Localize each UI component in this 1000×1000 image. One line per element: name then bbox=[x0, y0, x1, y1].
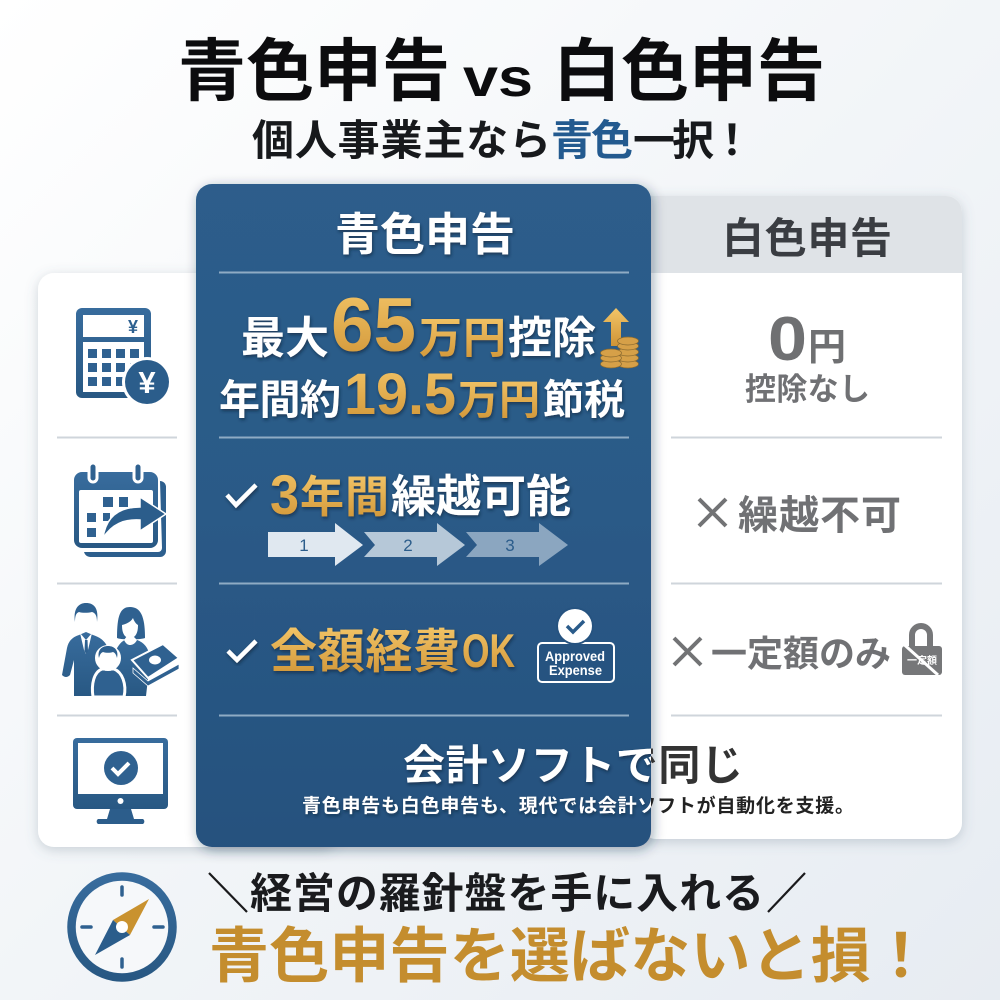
white column: no deduction: 控除なし bbox=[745, 372, 870, 407]
row 3: full expense heading: 全額経費 bbox=[270, 625, 460, 678]
row 2: three year arrows: 1 bbox=[299, 536, 309, 555]
row 4: shared heading and note on white: 青色申告も白色申告も、現代では会計ソフトが自動化を支援。 bbox=[302, 794, 854, 817]
icon: crossed lock: 一定額 bbox=[907, 654, 937, 667]
white column header bbox=[640, 196, 962, 273]
row 2: three year arrows bbox=[268, 523, 568, 566]
child bbox=[92, 669, 125, 697]
white column: no deduction: 円 bbox=[808, 327, 846, 369]
blue column header: 青色申告 bbox=[335, 209, 515, 260]
panel: blue column bbox=[196, 184, 651, 847]
icon: crossed lock bbox=[899, 626, 942, 675]
subtitle: 一択！ bbox=[633, 117, 753, 164]
row 1: deduction amount: 65 bbox=[331, 283, 416, 368]
row 1: deduction amount: 19.5 bbox=[344, 362, 456, 427]
row 4: shared heading and note on white bbox=[651, 746, 842, 814]
row 3: full expense heading: OK bbox=[462, 624, 515, 677]
row 1: deduction amount bbox=[219, 283, 625, 427]
row 2: three year arrows: 3 bbox=[505, 536, 515, 555]
row 4: shared heading and note on blue bbox=[303, 744, 651, 818]
icon: coins and up arrow bbox=[600, 308, 638, 368]
row 1: deduction amount: 節税 bbox=[543, 377, 625, 423]
icon: family with money bbox=[62, 603, 179, 697]
row 2: carryover heading bbox=[270, 463, 571, 526]
icon: approved expense stamp: Approved bbox=[545, 648, 605, 664]
icon: calculator: ¥ bbox=[128, 317, 138, 337]
row 3: check mark bbox=[228, 641, 256, 660]
subtitle: 個人事業主なら bbox=[252, 117, 551, 164]
title: vs bbox=[463, 48, 533, 108]
bottom call to action: 青色申告を選ばないと損！ bbox=[209, 923, 931, 990]
title: 青色申告 bbox=[178, 34, 450, 110]
row 1: deduction amount: 最大 bbox=[241, 314, 329, 363]
row 1: deduction amount: 年間約 bbox=[219, 377, 341, 423]
subtitle bbox=[252, 117, 753, 164]
row 4: shared heading and note on blue: 会計ソフトで同じ bbox=[403, 742, 743, 789]
divider lines bbox=[57, 272, 942, 716]
row 2: carryover heading: 3 bbox=[270, 463, 299, 526]
man bbox=[62, 632, 107, 696]
bottom tagline: 経営の羅針盤を手に入れる bbox=[250, 870, 764, 917]
white column: no deduction: 0 bbox=[768, 305, 807, 374]
money stack bbox=[132, 644, 179, 678]
row 1: deduction amount: 万円 bbox=[419, 315, 506, 363]
row 1: deduction amount: 控除 bbox=[508, 314, 596, 363]
panel: white comparison card bbox=[38, 196, 962, 847]
title bbox=[178, 34, 825, 110]
row 2: carryover heading: 繰越可能 bbox=[391, 471, 571, 522]
icon: approved expense stamp: Expense bbox=[549, 662, 602, 678]
icon: compass bbox=[72, 876, 172, 978]
icon: approved expense stamp bbox=[538, 607, 614, 682]
title: 白色申告 bbox=[553, 34, 825, 110]
row 4: shared heading and note on blue: 青色申告も白色申告も、現代では会計ソフトが自動化を支援。 bbox=[302, 794, 854, 817]
white column: fixed amount only: 一定額のみ bbox=[711, 633, 891, 674]
subtitle: 青色 bbox=[551, 117, 633, 164]
row 2: check mark bbox=[227, 485, 256, 505]
row 4: shared heading and note on white: 会計ソフトで同じ bbox=[403, 742, 743, 789]
woman bbox=[115, 639, 149, 696]
icon: monitor with check bbox=[73, 738, 168, 824]
icon: calculator: ¥ bbox=[138, 365, 156, 400]
white column: no carryover: 繰越不可 bbox=[738, 494, 901, 538]
row 1: deduction amount: 万円 bbox=[458, 377, 540, 423]
row 2: carryover heading: 年間 bbox=[300, 473, 389, 522]
white column header: 白色申告 bbox=[722, 215, 892, 262]
white column: no deduction bbox=[745, 305, 870, 407]
icon: calendar with arrow bbox=[74, 463, 166, 557]
row 2: three year arrows: 2 bbox=[403, 536, 413, 555]
icon: calculator bbox=[76, 308, 172, 407]
